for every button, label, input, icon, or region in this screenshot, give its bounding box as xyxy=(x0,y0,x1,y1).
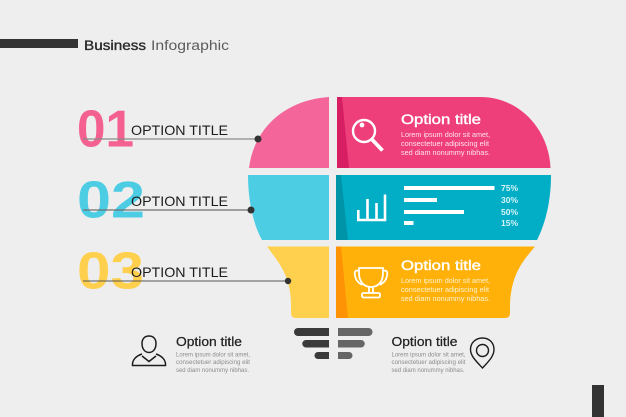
body text: Lorem ipsum dolor sit amet, xyxy=(176,352,250,358)
body text: Lorem ipsum dolor sit amet, xyxy=(401,276,490,285)
heading: Option title xyxy=(401,112,481,127)
icon: trophy xyxy=(355,268,387,298)
heading: Option title xyxy=(176,335,242,349)
body text xyxy=(401,130,490,157)
icon: magnifier xyxy=(353,120,382,150)
bottom right block xyxy=(392,335,494,374)
body text xyxy=(176,352,250,374)
heading: Option title xyxy=(392,335,458,349)
leader line 2 xyxy=(83,206,254,214)
panel: yellow left xyxy=(267,246,329,318)
funnel bars xyxy=(294,328,372,359)
body text: sed diam nonummy nibhas. xyxy=(401,148,490,157)
leader line 1 xyxy=(83,136,262,142)
percentages xyxy=(501,183,518,228)
panel: blue right xyxy=(336,175,551,240)
percentages: 50% xyxy=(501,207,518,217)
heading: Option title xyxy=(401,258,481,273)
body text: sed diam nonummy nibhas. xyxy=(176,367,249,374)
body text: consectetuer adipiscing elit xyxy=(392,359,466,366)
title: Business xyxy=(84,38,146,53)
body text: sed diam nonummy nibhas. xyxy=(401,294,490,303)
title: Infographic xyxy=(151,38,229,53)
bottom left block xyxy=(132,335,250,374)
leader line 3 xyxy=(83,278,291,284)
percentages: 75% xyxy=(501,183,518,193)
panel: pink right xyxy=(337,97,550,168)
bars xyxy=(404,186,494,225)
number 01: 01 xyxy=(77,100,134,158)
percentages: 30% xyxy=(501,195,518,205)
option title 3: OPTION TITLE xyxy=(131,264,228,280)
body text: consectetuer adipiscing elit xyxy=(176,359,250,366)
panel: blue left xyxy=(248,175,329,240)
body text: sed diam nonummy nibhas. xyxy=(392,367,465,374)
icon: person xyxy=(132,336,166,366)
body text xyxy=(401,276,490,303)
title xyxy=(84,38,229,53)
body text xyxy=(392,352,466,374)
percentages: 15% xyxy=(501,218,518,228)
number 02: 02 xyxy=(77,172,145,230)
option title 2: OPTION TITLE xyxy=(131,193,228,209)
icon: location pin xyxy=(470,338,494,368)
header bar xyxy=(0,39,78,48)
panel: yellow right xyxy=(336,246,535,318)
icon: bar chart xyxy=(358,194,385,220)
option title 1: OPTION TITLE xyxy=(131,122,228,138)
panel: pink left xyxy=(249,97,329,168)
body text: Lorem ipsum dolor sit amet, xyxy=(401,130,490,139)
body text: Lorem ipsum dolor sit amet, xyxy=(392,352,466,358)
number 03: 03 xyxy=(77,242,144,300)
body text: consectetuer adipiscing elit xyxy=(401,285,489,294)
corner bar xyxy=(592,385,604,417)
body text: consectetuer adipiscing elit xyxy=(401,139,489,148)
